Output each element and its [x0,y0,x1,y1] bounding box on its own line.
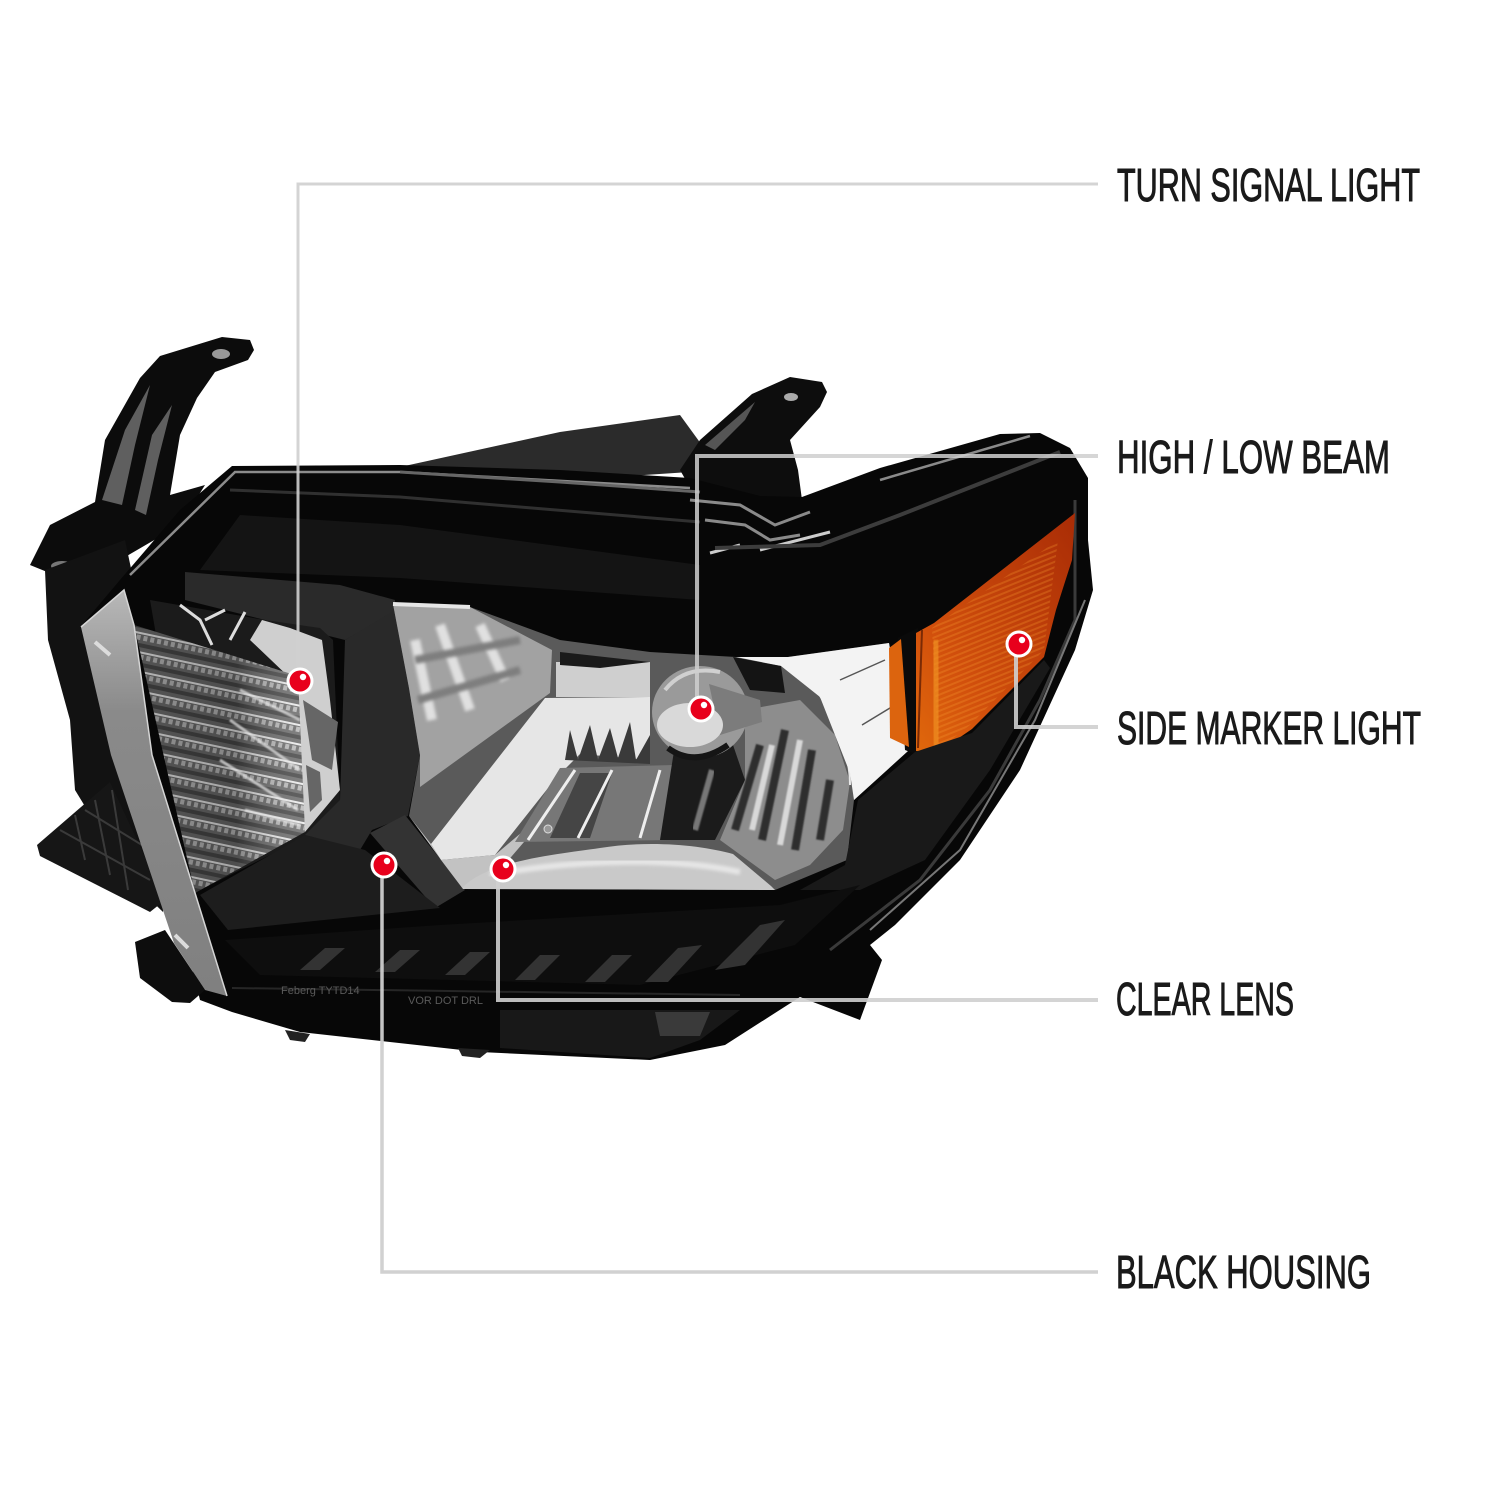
turn signal lens texture [134,625,305,893]
molded lettering: VOR DOT DRL [408,995,483,1007]
rear vent grid [37,782,165,912]
reflector dark shard [660,745,745,840]
label: clear lens: CLEAR LENS [1116,973,1294,1025]
main housing body [82,433,1093,1060]
leader line: black housing [382,865,1098,1272]
marker dot: side marker light [1006,630,1032,658]
leader line: side marker light [1016,645,1098,727]
center frame [305,610,420,850]
lower right glow [500,1010,740,1058]
reflector gray panel [515,765,674,842]
molded lettering: Feberg TYTD14 [281,985,360,997]
mounting bracket: right [680,377,827,505]
marker dot: turn signal light [286,668,314,694]
molded lettering [281,985,483,1007]
amber side marker: inner [889,639,909,747]
rear housing [45,540,180,912]
bottom fasteners [285,1030,490,1058]
frame tab [370,815,465,908]
reflector white panel [431,697,650,860]
leader line: turn signal light [298,184,1098,680]
headlight product illustration [30,337,1093,1060]
marker dot: high / low beam [688,696,714,722]
reflector top fins [556,662,650,697]
white side reflector [736,643,908,800]
reflector lower dome [463,844,775,890]
amber side marker light [916,513,1075,753]
chrome reflector [393,604,908,890]
marker dot: clear lens [490,856,516,882]
reflector upper left fluting [393,604,552,787]
bulb [652,657,785,758]
upper inner trim [200,515,700,600]
clear lens side strip [81,590,227,996]
reflector base [393,604,908,890]
reflector right faceted bowl [720,700,850,880]
upper glossy trim [130,436,1085,950]
leader line: high / low beam [697,456,1098,708]
marker dot: black housing [370,852,398,878]
lower vent slats [225,885,860,995]
side marker gap [898,628,918,755]
lower mount tab [135,930,205,1003]
turn signal chrome window [150,600,340,890]
label: black housing: BLACK HOUSING [1116,1246,1371,1298]
lower lens band [800,660,1050,890]
mounting bracket: left [30,337,254,578]
dark rear cover [400,415,720,490]
leader line: clear lens [498,870,1098,1000]
lower vent section [200,835,440,930]
